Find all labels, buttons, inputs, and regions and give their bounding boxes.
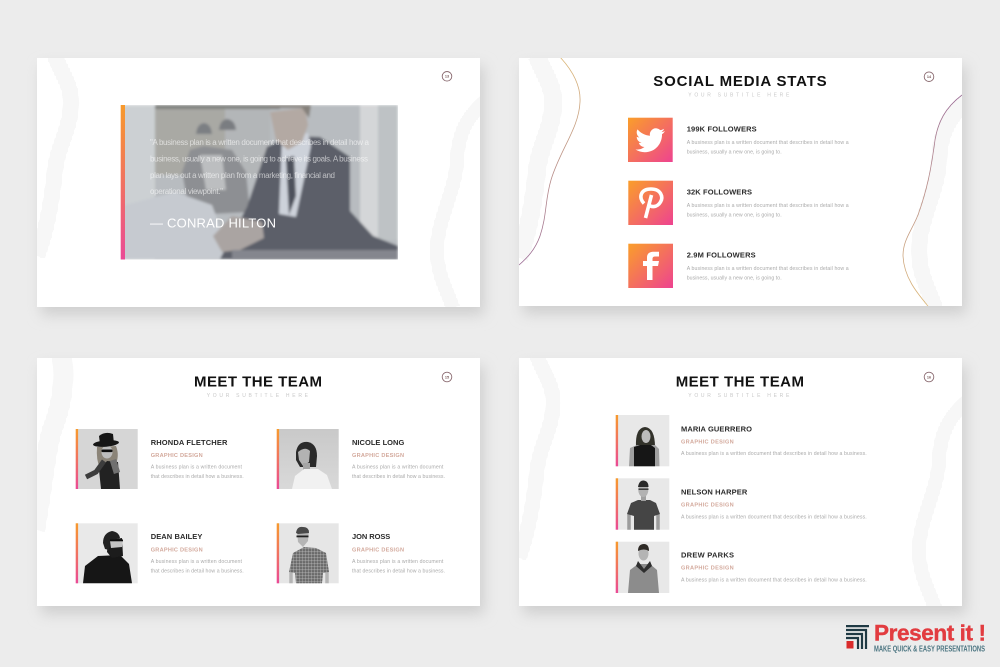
- member: Dean Bailey: [151, 532, 244, 574]
- icon: twitter: [628, 118, 673, 162]
- page number 15: 15: [445, 375, 449, 379]
- page number 16: 16: [927, 375, 931, 379]
- member: Drew Parks: [681, 551, 867, 584]
- stat: pinterest followers: 32K FOLLOWERS: [687, 188, 752, 197]
- member: Rhonda Fletcher: that describes in detail how a business.: [151, 474, 244, 480]
- portrait: Nicole Long: [277, 429, 339, 489]
- member: Nelson Harper: A business plan is a written document that describes in detail how a business.: [681, 514, 867, 520]
- member: Maria Guerrero: A business plan is a written document that describes in detail how a business.: [681, 451, 867, 457]
- member: Nelson Harper: [681, 487, 867, 520]
- member: Dean Bailey: A business plan is a written document: [151, 559, 243, 565]
- title: MEET THE TEAM: [676, 374, 804, 391]
- quote text: business, usually a new one, is going to achieve its goals. A business: [150, 155, 368, 164]
- member: Nicole Long: [352, 438, 445, 480]
- member: Dean Bailey: that describes in detail how a business.: [151, 568, 244, 574]
- stat: pinterest followers: [687, 188, 849, 218]
- panel: quote slide: [37, 56, 484, 315]
- title: MEET THE TEAM: [194, 374, 322, 391]
- portrait: Nelson Harper: [616, 478, 669, 530]
- stat: facebook followers: 2.9M FOLLOWERS: [687, 251, 756, 260]
- quote text: operational viewpoint.": [150, 187, 223, 196]
- stat: twitter followers: business, usually a new one, is going to.: [687, 149, 782, 155]
- portrait: Rhonda Fletcher: [76, 429, 138, 489]
- logo mark: [846, 626, 869, 649]
- subtitle: YOUR SUBTITLE HERE: [688, 393, 790, 399]
- member: Maria Guerrero: GRAPHIC DESIGN: [681, 439, 734, 445]
- member: Drew Parks: A business plan is a written document that describes in detail how a business.: [681, 578, 867, 584]
- panel: meet the team, four members: [35, 356, 484, 614]
- member: Nicole Long: NICOLE LONG: [352, 438, 404, 447]
- member: Dean Bailey: DEAN BAILEY: [151, 532, 202, 541]
- panel: meet the team, three members: [519, 356, 966, 614]
- portrait: Drew Parks: [616, 542, 669, 593]
- stat: twitter followers: [687, 125, 849, 155]
- member: Nicole Long: GRAPHIC DESIGN: [352, 453, 404, 459]
- stat: facebook followers: A business plan is a written document that describes in detail how a: [687, 266, 849, 272]
- photo: businessman at laptop: [121, 105, 398, 260]
- title: SOCIAL MEDIA STATS: [653, 73, 827, 90]
- member: Drew Parks: DREW PARKS: [681, 551, 734, 560]
- logo: Present it: [846, 621, 986, 654]
- member: Jon Ross: [352, 532, 445, 574]
- stat: facebook followers: [687, 251, 849, 281]
- member: Nicole Long: that describes in detail how a business.: [352, 474, 445, 480]
- page number 13: 13: [445, 75, 449, 79]
- member: Maria Guerrero: MARIA GUERRERO: [681, 424, 752, 433]
- panel: social media stats: [519, 56, 966, 314]
- quote text: plan lays out a written plan from a marketing, financial and: [150, 171, 335, 180]
- subtitle: YOUR SUBTITLE HERE: [207, 393, 309, 399]
- stat: twitter followers: A business plan is a written document that describes in detail how a: [687, 140, 849, 146]
- page number 13: [442, 72, 452, 81]
- member: Jon Ross: JON ROSS: [352, 532, 390, 541]
- member: Nelson Harper: NELSON HARPER: [681, 487, 748, 496]
- member: Jon Ross: GRAPHIC DESIGN: [352, 547, 404, 553]
- logo wordmark: Present it !: [874, 621, 986, 646]
- stat: pinterest followers: business, usually a new one, is going to.: [687, 212, 782, 218]
- member: Jon Ross: A business plan is a written document: [352, 559, 444, 565]
- quote text: "A business plan is a written document that describes in detail how a: [150, 138, 370, 147]
- page number 16: [924, 372, 934, 382]
- member: Drew Parks: GRAPHIC DESIGN: [681, 566, 734, 572]
- portrait: Maria Guerrero: [616, 415, 669, 466]
- page number 15: [442, 372, 452, 382]
- stat: twitter followers: 199K FOLLOWERS: [687, 125, 757, 134]
- subtitle: YOUR SUBTITLE HERE: [688, 93, 790, 99]
- page number 14: 14: [927, 75, 932, 79]
- member: Nelson Harper: GRAPHIC DESIGN: [681, 502, 734, 508]
- portrait: Jon Ross: [277, 523, 339, 583]
- stat: facebook followers: business, usually a new one, is going to.: [687, 275, 782, 281]
- icon: pinterest: [628, 181, 673, 225]
- gradient bar: [121, 105, 125, 260]
- decorative curve left: [519, 57, 580, 265]
- portrait: Dean Bailey: [76, 523, 138, 583]
- member: Rhonda Fletcher: A business plan is a written document: [151, 465, 243, 471]
- member: Jon Ross: that describes in detail how a business.: [352, 568, 445, 574]
- member: Nicole Long: A business plan is a written document: [352, 465, 444, 471]
- page number 14: [924, 72, 934, 81]
- quote text: [150, 138, 370, 196]
- quote author: — CONRAD HILTON: [150, 216, 276, 231]
- member: Rhonda Fletcher: RHONDA FLETCHER: [151, 438, 228, 447]
- stat: pinterest followers: A business plan is a written document that describes in detail how a: [687, 203, 849, 209]
- member: Rhonda Fletcher: [151, 438, 244, 480]
- member: Maria Guerrero: [681, 424, 867, 457]
- member: Rhonda Fletcher: GRAPHIC DESIGN: [151, 453, 203, 459]
- member: Dean Bailey: GRAPHIC DESIGN: [151, 547, 203, 553]
- icon: facebook: [628, 244, 673, 288]
- decorative curve right: [903, 95, 962, 306]
